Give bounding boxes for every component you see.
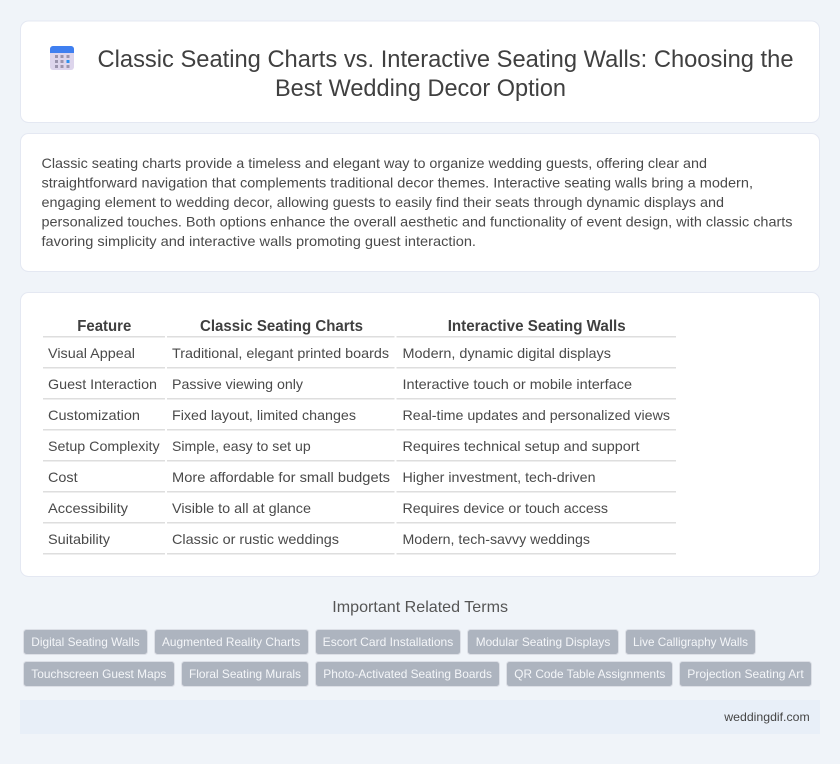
panel: introduction [20, 134, 820, 272]
table row: accessibility [48, 500, 608, 516]
table row: setup complexity: Simple, easy to set up [172, 438, 311, 454]
table row: visual appeal: Modern, dynamic digital displays [402, 345, 611, 361]
text block: introduction paragraph: personalized touches. Both options enhance the overall aesthetic and functionality of event design, with classic charts [42, 214, 792, 230]
tag: digital seating walls: Digital Seating Walls [31, 635, 140, 649]
table row: cost: Cost [48, 469, 78, 485]
table row: suitability [48, 531, 590, 547]
text block: introduction paragraph: straightforward navigation that complements traditional decor themes. Interactive seating walls bring a modern, [42, 174, 753, 190]
table row: accessibility: Requires device or touch access [402, 500, 608, 516]
table row: accessibility: Visible to all at glance [172, 500, 311, 516]
title: Classic Seating Charts vs. Interactive Seating Walls: Choosing the [98, 46, 794, 73]
tag: floral seating murals [182, 662, 308, 686]
tag: touchscreen guest maps [24, 662, 174, 686]
footer [20, 700, 820, 734]
tag: digital seating walls [24, 630, 148, 654]
table header row [77, 318, 626, 335]
text block: introduction paragraph: Classic seating charts provide a timeless and elegant way to organize wedding guests, offering clear and [42, 155, 707, 171]
tag: augmented reality charts [154, 630, 308, 654]
tag: escort card installations [316, 630, 460, 654]
table row: accessibility: Accessibility [48, 500, 128, 516]
table row: guest interaction [48, 376, 632, 392]
heading: important related terms: Important Related Terms [332, 599, 508, 616]
tag: escort card installations: Escort Card Installations [323, 635, 453, 649]
table row: customization: Real-time updates and personalized views [402, 407, 670, 423]
table row: cost: More affordable for small budgets [172, 469, 390, 485]
tag: qr code table assignments: QR Code Table Assignments [514, 667, 665, 681]
table row: cost [48, 469, 596, 485]
title: Best Wedding Decor Option [275, 75, 566, 102]
table row: suitability: Classic or rustic weddings [172, 531, 339, 547]
table row: customization [48, 407, 670, 423]
tag: modular seating displays: Modular Seating Displays [476, 635, 610, 649]
text block: introduction paragraph: favoring simplicity and interactive walls promoting guest interaction. [42, 233, 476, 249]
tags: related terms [24, 630, 812, 686]
tag: live calligraphy walls [626, 630, 756, 654]
table header row: Classic Seating Charts [200, 318, 363, 335]
table row: visual appeal: Traditional, elegant printed boards [172, 345, 389, 361]
table row: cost: Higher investment, tech-driven [402, 469, 596, 485]
title [98, 46, 794, 102]
table row: setup complexity: Requires technical setup and support [402, 438, 640, 454]
table row: visual appeal [48, 345, 611, 361]
table row: customization: Fixed layout, limited changes [172, 407, 356, 423]
tag: photo-activated seating boards: Photo-Activated Seating Boards [323, 667, 492, 681]
footer source text: weddingdif.com [723, 710, 810, 724]
table row: setup complexity: Setup Complexity [48, 438, 160, 454]
tag: modular seating displays [468, 630, 618, 654]
table row: customization: Customization [48, 407, 140, 423]
table row: guest interaction: Interactive touch or mobile interface [402, 376, 632, 392]
table header row: Interactive Seating Walls [448, 318, 626, 335]
table row: suitability: Modern, tech-savvy weddings [402, 531, 590, 547]
table row: guest interaction: Guest Interaction [48, 376, 157, 392]
table row: suitability: Suitability [48, 531, 110, 547]
tag: live calligraphy walls: Live Calligraphy Walls [633, 635, 748, 649]
table header row: Feature [77, 318, 131, 335]
panel: comparison table [20, 292, 820, 576]
panel: header [20, 21, 820, 122]
text block: introduction paragraph [42, 155, 792, 249]
icon: calendar seating grid [50, 46, 74, 70]
text block: introduction paragraph: engaging element to wedding decor, allowing guests to easily find their seats through dynamic displays and [42, 194, 724, 210]
tag: qr code table assignments [506, 662, 672, 686]
tag: projection seating art: Projection Seating Art [687, 667, 804, 681]
table row: guest interaction: Passive viewing only [172, 376, 303, 392]
table row: visual appeal: Visual Appeal [48, 345, 135, 361]
tag: photo-activated seating boards [316, 662, 500, 686]
tag: floral seating murals: Floral Seating Murals [189, 667, 301, 681]
tag: projection seating art [680, 662, 812, 686]
table row: setup complexity [48, 438, 640, 454]
tag: augmented reality charts: Augmented Reality Charts [162, 635, 300, 649]
tag: touchscreen guest maps: Touchscreen Guest Maps [31, 667, 166, 681]
